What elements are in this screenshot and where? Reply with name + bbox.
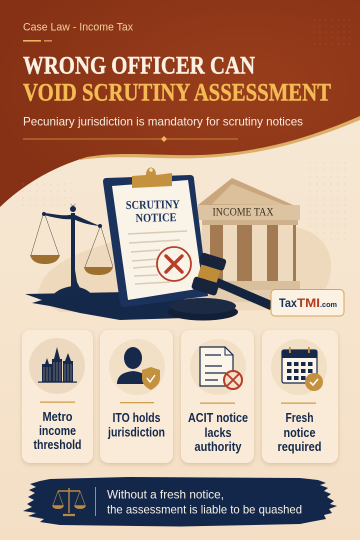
- background blob: [38, 226, 331, 312]
- icon: clip: [132, 168, 172, 188]
- card label: Fresh: [286, 410, 314, 425]
- card label: income: [39, 423, 76, 438]
- logo badge: Tax: [279, 298, 298, 310]
- icon: city skyline: [38, 347, 77, 383]
- eyebrow: Case Law - Income Tax: [23, 22, 134, 34]
- logo badge: TMI: [297, 298, 320, 310]
- building label: INCOME TAX: [212, 204, 274, 218]
- panel: card 2 ITO: [100, 330, 173, 463]
- panel: card 3 ACIT: [181, 330, 254, 463]
- card label: threshold: [34, 437, 82, 452]
- panel: header: [0, 0, 360, 207]
- navy brush shadow: [25, 292, 190, 320]
- callout text: the assessment is liable to be quashed: [107, 504, 302, 516]
- card label: notice: [284, 425, 316, 440]
- card label: ACIT notice: [188, 410, 248, 425]
- icon: calendar with check: [282, 347, 323, 391]
- icon: courthouse: [190, 178, 305, 302]
- clipboard heading: SCRUTINY: [126, 197, 180, 212]
- dotted texture: [22, 162, 350, 242]
- card label: lacks: [204, 425, 232, 440]
- icon: document with prohibition: [200, 347, 242, 389]
- icon: scales: [53, 488, 85, 515]
- card label: required: [278, 439, 322, 454]
- icon: officer with shield: [117, 347, 160, 390]
- logo badge: .com: [320, 300, 337, 309]
- card label: jurisdiction: [107, 424, 165, 440]
- icon: red x stamp: [157, 247, 191, 281]
- callout text: Without a fresh notice,: [107, 488, 224, 502]
- title line 1: WRONG OFFICER CAN: [23, 50, 255, 80]
- panel: card 4 fresh notice: [262, 330, 338, 463]
- card label: authority: [194, 439, 242, 454]
- clipboard: [103, 168, 208, 307]
- panel: card 1 metro income: [22, 330, 93, 463]
- clipboard heading: NOTICE: [135, 210, 177, 225]
- subtitle: Pecuniary jurisdiction is mandatory for scrutiny notices: [23, 116, 303, 128]
- icon: scales: [30, 203, 113, 295]
- divider: [23, 40, 238, 142]
- card label: ITO holds: [112, 410, 160, 425]
- icon: gavel: [168, 252, 272, 320]
- card label: Metro: [42, 409, 73, 424]
- clipboard heading: [126, 197, 180, 225]
- logo badge: [271, 290, 344, 316]
- callout banner: [23, 477, 337, 526]
